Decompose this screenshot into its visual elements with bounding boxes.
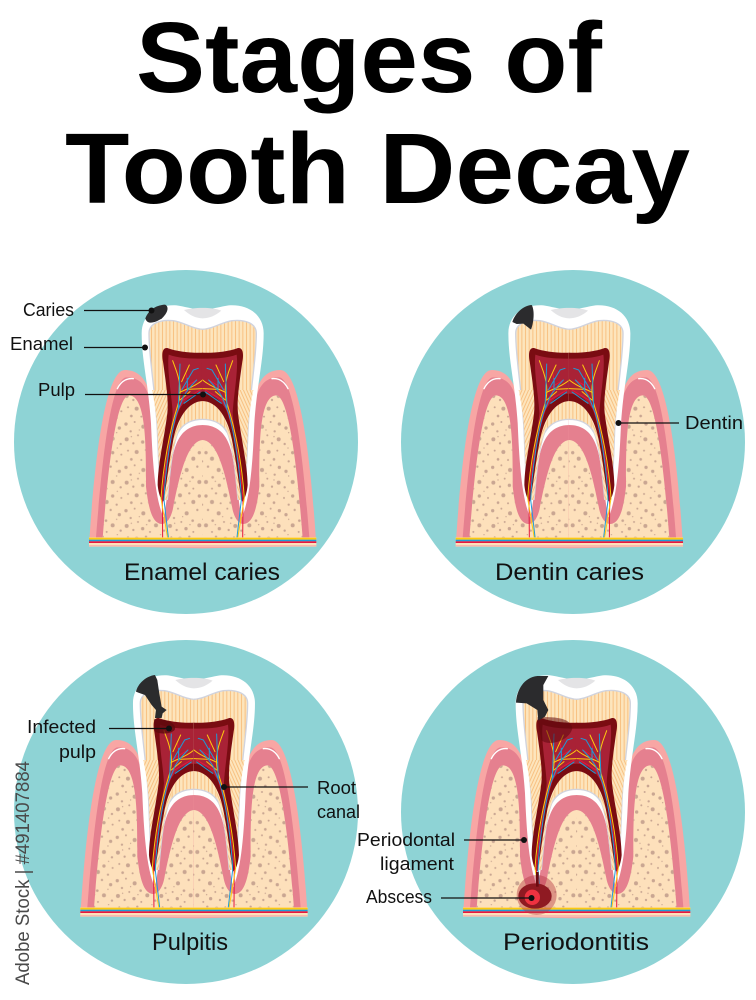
panel: dentin caries: Dentin <box>685 412 743 433</box>
title <box>65 2 690 225</box>
panel: periodontitis: ligament <box>380 853 454 874</box>
panel: pulpitis: pulp <box>59 741 96 762</box>
panel: enamel caries: Pulp <box>38 379 75 400</box>
panel: periodontitis: Periodontal <box>357 829 455 850</box>
title: Stages of <box>136 2 603 114</box>
panel: enamel caries: Enamel <box>10 333 73 354</box>
panel: enamel caries: Caries <box>23 299 74 320</box>
panel: periodontitis: Abscess <box>366 886 432 907</box>
panel: dentin caries: Dentin caries <box>495 559 644 586</box>
title: Tooth Decay <box>65 113 690 225</box>
panel: pulpitis <box>14 640 360 984</box>
panel: pulpitis: Root <box>317 777 356 798</box>
panel: pulpitis: canal <box>317 801 360 822</box>
panel: enamel caries <box>10 270 358 614</box>
panel: periodontitis: Periodontitis <box>503 929 649 956</box>
panel: pulpitis: Infected <box>27 716 96 737</box>
panel: dentin caries <box>401 270 745 614</box>
stock credit: Adobe Stock | #491407884 <box>13 761 34 985</box>
panel: periodontitis <box>357 640 745 984</box>
panel: enamel caries: Enamel caries <box>124 559 280 586</box>
panel: pulpitis: Pulpitis <box>152 929 228 956</box>
